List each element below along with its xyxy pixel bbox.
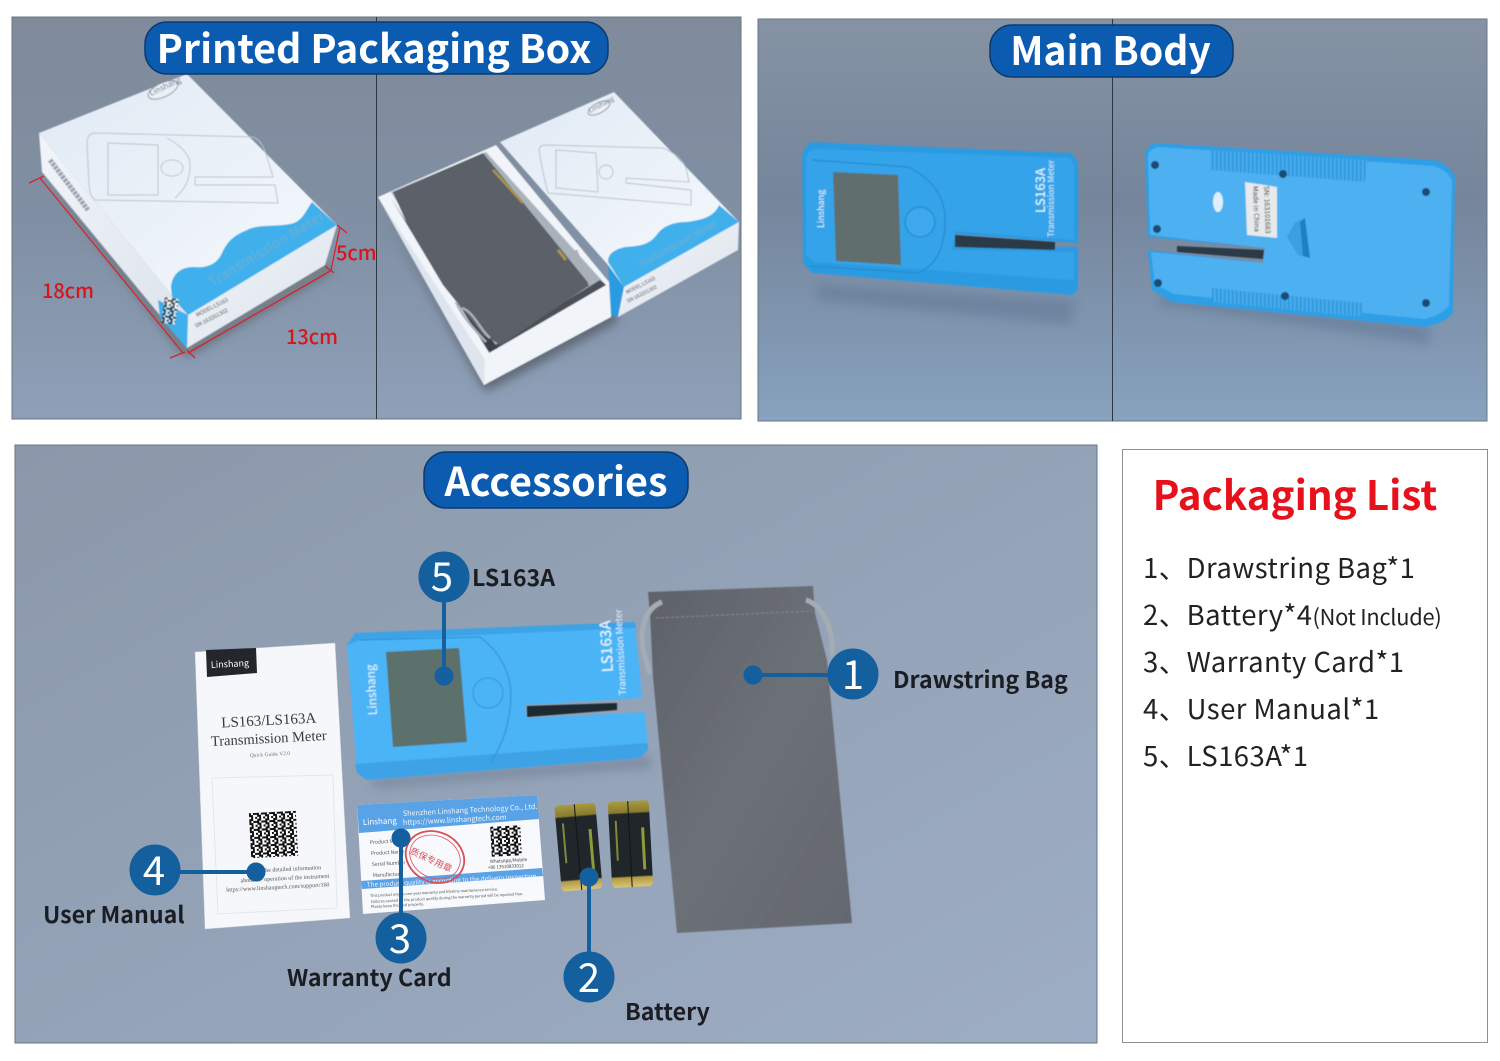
back view slot xyxy=(1177,246,1264,259)
box sketch of meter xyxy=(87,133,278,203)
warranty card: This product enjoys one-year warranty and lifetime maintenance service. xyxy=(370,886,498,899)
warranty card: Linshang xyxy=(363,815,398,828)
callout 1: drawstring bag xyxy=(744,643,1068,701)
open box with bag: MODEL:LS163 xyxy=(625,275,657,296)
meter back view xyxy=(1145,143,1455,345)
warranty card: https://www.linshangtech.com xyxy=(403,813,507,828)
back view ribbed grips xyxy=(1210,150,1367,182)
user manual: LS163/LS163A xyxy=(221,711,317,731)
panel: accessories xyxy=(15,445,1097,1043)
warranty card xyxy=(357,795,545,914)
warranty card: The product quality is according to the delivery inspection xyxy=(367,871,537,889)
open box with bag xyxy=(378,92,739,390)
callout 5: LS163A xyxy=(419,545,555,685)
front view labels: LS163A xyxy=(1030,167,1049,213)
callout 4: user manual: User Manual xyxy=(43,896,185,930)
meter front view: Linshang xyxy=(814,190,827,228)
box side print xyxy=(50,160,88,210)
front view slot xyxy=(955,235,1055,250)
box lid xyxy=(500,92,739,287)
list items: 1、Drawstring Bag*1 xyxy=(1143,546,1415,586)
meter LS163A: Transmission Meter xyxy=(610,609,629,696)
meter LS163A: Linshang xyxy=(361,664,381,716)
callout 1: drawstring bag: Drawstring Bag xyxy=(893,661,1068,695)
back view serial label xyxy=(1245,182,1277,238)
closed packaging box: SN:163201302 xyxy=(193,306,229,330)
open box with bag: Transmission Meter xyxy=(636,215,720,271)
warranty card: 质保专用章 xyxy=(408,844,454,875)
title: main body: Main Body xyxy=(1010,21,1211,77)
meter LS163A: LS163A xyxy=(594,619,618,673)
panel: packaging list xyxy=(1122,450,1488,1042)
back view serial label: SN: 163101683 xyxy=(1261,186,1273,234)
list items: 2、Battery*4(Not Include) xyxy=(1143,593,1441,633)
closed packaging box: MODEL:LS163 xyxy=(194,296,229,319)
list items: 4、User Manual*1 xyxy=(1143,687,1380,727)
main body background xyxy=(758,19,1487,421)
callout 3: warranty card xyxy=(287,829,452,993)
back view screws xyxy=(1151,161,1430,307)
closed packaging box: Linshang xyxy=(148,74,183,99)
dimension: 13cm: 13cm xyxy=(286,321,338,350)
panel: main body xyxy=(758,19,1487,421)
warranty card: WhatsApp/Mobile xyxy=(490,856,528,865)
callout 5: LS163A: 5 xyxy=(431,545,453,603)
list items: 5、LS163A*1 xyxy=(1143,734,1308,774)
callout 2: battery xyxy=(564,868,710,1027)
title: printed packaging box: Printed Packaging Box xyxy=(157,18,591,75)
warranty card: Product Name xyxy=(371,848,405,857)
callout 3: warranty card: Warranty Card xyxy=(287,959,452,993)
list items: 3、Warranty Card*1 xyxy=(1143,640,1404,680)
callout 3: warranty card: 3 xyxy=(389,907,411,965)
box text: Transmission Meter xyxy=(204,205,328,290)
user manual: Linshang xyxy=(211,656,249,671)
callout 5: LS163A: LS163A xyxy=(472,559,555,593)
drawstring bag in box xyxy=(391,198,498,352)
user manual: Quick Guide V2.0 xyxy=(250,751,291,759)
box panel background xyxy=(12,17,741,419)
list items xyxy=(1143,546,1441,774)
user manual: to get the detailed information xyxy=(248,864,321,875)
dimension: 5cm: 5cm xyxy=(336,237,377,266)
callout 4: user manual xyxy=(43,839,265,930)
back view logo xyxy=(1213,192,1223,212)
warranty card: Product Model xyxy=(370,837,405,846)
back view battery latch xyxy=(1287,218,1310,258)
front view screen xyxy=(833,172,901,265)
batteries xyxy=(554,800,653,892)
front view button xyxy=(905,207,935,237)
accessories background xyxy=(15,445,1097,1043)
meter front view: Transmission Meter xyxy=(1045,159,1057,237)
warranty card: +86 13510833012 xyxy=(488,863,525,871)
warranty card: Serial Number xyxy=(372,859,406,868)
back view serial label: Made in China xyxy=(1250,186,1262,232)
callout 1: drawstring bag: 1 xyxy=(842,643,864,701)
warranty card: Please keep the card properly. xyxy=(371,901,424,910)
title: accessories: Accessories xyxy=(443,451,668,508)
user manual xyxy=(195,643,350,929)
user manual: about the operation of the instrument xyxy=(240,873,330,884)
callout 2: battery: Battery xyxy=(625,993,710,1027)
open box with bag: Linshang xyxy=(586,93,616,115)
warranty card: Shenzhen Linshang Technology Co., Ltd. xyxy=(403,802,538,819)
warranty card: Manufacture xyxy=(373,870,403,879)
dimension: 18cm: 18cm xyxy=(42,275,94,304)
drawstring bag xyxy=(642,586,852,933)
panel: printed packaging box xyxy=(12,17,741,419)
dimension lines xyxy=(29,176,347,358)
user manual: Transmission Meter xyxy=(211,728,327,750)
box logo xyxy=(146,77,180,103)
meter front view xyxy=(802,142,1078,325)
closed packaging box xyxy=(39,74,337,356)
callout 2: battery: 2 xyxy=(578,946,600,1004)
warranty card: Failures caused by the product quality during the warranty period will be repaired free. xyxy=(371,891,523,905)
list heading: Packaging List xyxy=(1153,463,1437,522)
meter LS163A xyxy=(347,609,652,788)
open box with bag: SN:163201302 xyxy=(626,283,658,305)
callout 4: user manual: 4 xyxy=(143,839,165,897)
user manual: https://www.linshangtech.com/support/160 xyxy=(226,882,330,894)
list border xyxy=(1122,450,1488,1042)
